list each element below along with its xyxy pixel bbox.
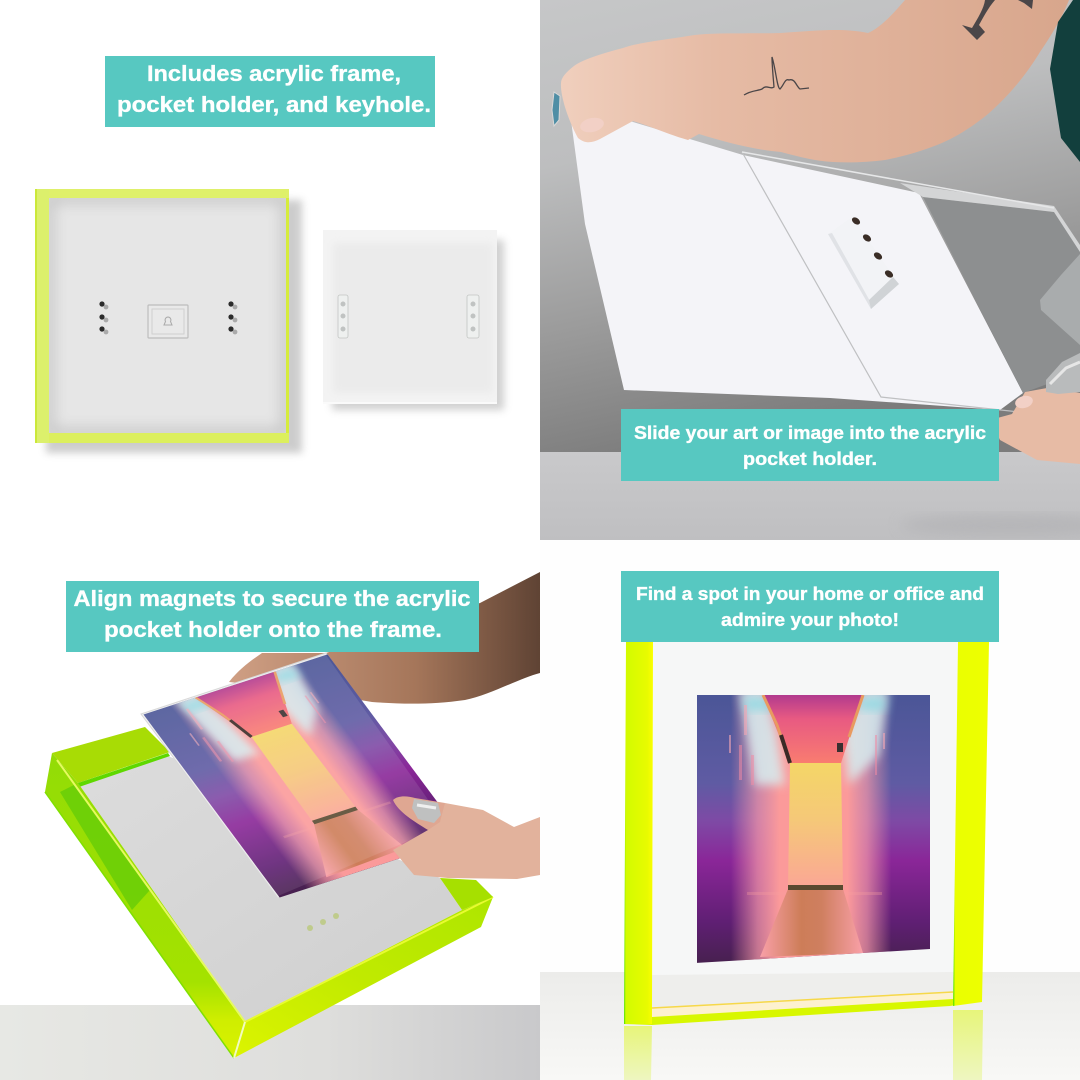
- magnet dots: [307, 913, 339, 931]
- caption: align: [66, 581, 479, 652]
- table surface: [540, 972, 1080, 1080]
- icon: upper arm: [229, 572, 540, 704]
- table surface: [540, 452, 1080, 540]
- table surface: [0, 1005, 540, 1080]
- icon: tilted neon frame: [45, 727, 493, 1058]
- right band: [953, 642, 989, 1006]
- icon: mounted art print: [692, 689, 935, 963]
- caption: includes: [105, 56, 435, 127]
- right corner: [440, 878, 493, 910]
- photo background: [540, 0, 1080, 452]
- caption: slide: pocket holder.: [743, 448, 877, 469]
- panel: frame components: [35, 56, 504, 453]
- magnet bar: [828, 216, 899, 309]
- icon: hand holding print: [393, 796, 540, 879]
- frame bottom band: [624, 992, 982, 1024]
- white paper sheet: [568, 98, 1023, 410]
- icon: standing neon frame: [624, 642, 989, 1080]
- icon: art print held over the frame: [137, 649, 468, 899]
- reflection left: [624, 1026, 652, 1080]
- panel: displayed frame: [540, 540, 1080, 1080]
- ring: [552, 92, 560, 126]
- caption: find a spot: admire your photo!: [721, 609, 899, 630]
- caption: includes: pocket holder, and keyhole.: [117, 92, 431, 117]
- inner mat: [652, 642, 958, 1008]
- icon: neon acrylic frame: [35, 189, 302, 453]
- frame floor: [78, 755, 462, 1022]
- caption: slide: Slide your art or image into the acrylic: [634, 422, 986, 443]
- table shadow: [928, 517, 1080, 531]
- thumb nail: [580, 118, 604, 132]
- second magnet bar: [1040, 254, 1080, 345]
- back band: [52, 727, 170, 783]
- forearm tattoo: [744, 57, 809, 95]
- left band: [45, 753, 245, 1058]
- icon: magnets and keyhole: [99, 301, 237, 338]
- upper arm tattoo: [962, 0, 1033, 40]
- photo background: [540, 540, 1080, 1080]
- icon: arm and hand: [552, 0, 1069, 162]
- panel: align magnets: [0, 572, 540, 1080]
- left band: [624, 642, 653, 1024]
- caption: find a spot: [621, 571, 999, 642]
- panel: slide art into holder: [540, 0, 1080, 540]
- caption: includes: Includes acrylic frame,: [147, 61, 401, 86]
- caption: find a spot: Find a spot in your home or office and: [636, 583, 984, 604]
- dark sleeve: [1050, 0, 1080, 162]
- icon: acrylic pocket holder: [323, 230, 504, 410]
- caption: align: Align magnets to secure the acrylic: [74, 586, 470, 611]
- caption: slide: [621, 409, 999, 481]
- clear pocket holder: [742, 152, 1080, 412]
- icon: right hand and ring: [990, 353, 1080, 464]
- reflection right: [953, 1010, 983, 1080]
- bottom band: [234, 897, 493, 1058]
- caption: align: pocket holder onto the frame.: [104, 617, 442, 642]
